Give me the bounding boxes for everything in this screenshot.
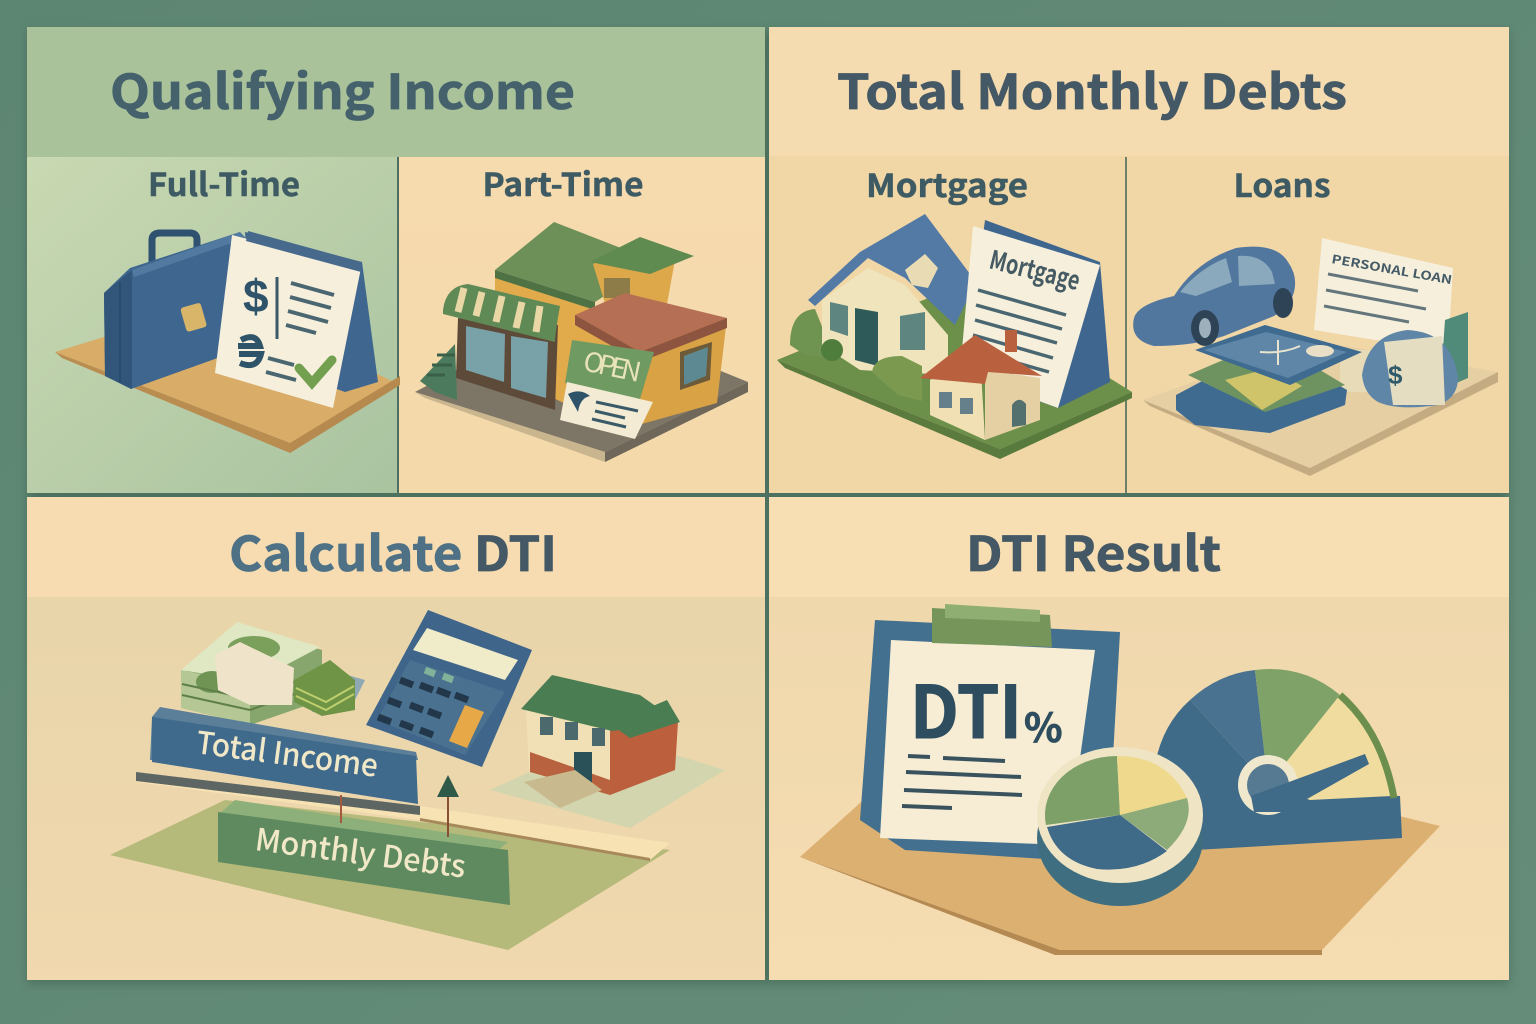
icon: car, loan document and wallet: PERSONAL LOAN: [1330, 250, 1453, 288]
icon: houses and mortgage document: Mortgage: [986, 240, 1084, 298]
panel: DTI result: [769, 497, 1509, 980]
label block: Total Income: Total Income: [194, 717, 381, 786]
panel: calculate DTI: [27, 497, 765, 980]
panel: qualifying income: [27, 27, 765, 493]
label block: Monthly Debts: [218, 800, 510, 905]
icon: shop building: OPEN: [580, 340, 645, 390]
icon: shop building: [415, 222, 748, 462]
heading: Qualifying Income: Qualifying Income: [110, 53, 575, 123]
icon: houses and mortgage document: [777, 214, 1132, 459]
arrow: down to debts: [340, 795, 342, 823]
label: Mortgage: Mortgage: [866, 161, 1028, 207]
base board: [800, 760, 1440, 955]
beam: [136, 772, 670, 861]
icon: car, loan document and wallet: [1133, 238, 1498, 476]
icon: gauge: [1155, 669, 1402, 850]
panel: total monthly debts: [769, 27, 1509, 493]
heading: DTI Result: DTI Result: [966, 515, 1221, 585]
icon: car, loan document and wallet: $: [1388, 360, 1403, 390]
icon: clipboard: DTI: [910, 654, 1022, 759]
sub-panel: part-time background: [398, 157, 765, 493]
label block: Monthly Debts: Monthly Debts: [253, 814, 469, 887]
heading band: qualifying income: [27, 27, 765, 157]
label: Part-Time: Part-Time: [482, 160, 644, 206]
arrow: up to income: [437, 775, 459, 837]
icon: calculator: [366, 610, 532, 767]
label block: Total Income: [150, 707, 418, 804]
icon: pie chart: [1037, 747, 1203, 906]
icon: clipboard: %: [1024, 696, 1063, 754]
label: Loans: Loans: [1234, 161, 1330, 207]
icon: briefcase and pay stub: [55, 231, 400, 453]
sub-panel: full-time background: [27, 157, 397, 493]
illustration: lower base: [110, 800, 670, 950]
icon: clipboard: [860, 604, 1120, 860]
heading: Calculate DTI: Calculate DTI: [229, 515, 557, 585]
label: Full-Time: Full-Time: [148, 160, 300, 206]
icon: money stacks: [181, 622, 365, 725]
heading: Total Monthly Debts: Total Monthly Debts: [837, 53, 1347, 123]
icon: small house: [521, 675, 680, 808]
icon: briefcase and pay stub: $: [243, 270, 269, 322]
